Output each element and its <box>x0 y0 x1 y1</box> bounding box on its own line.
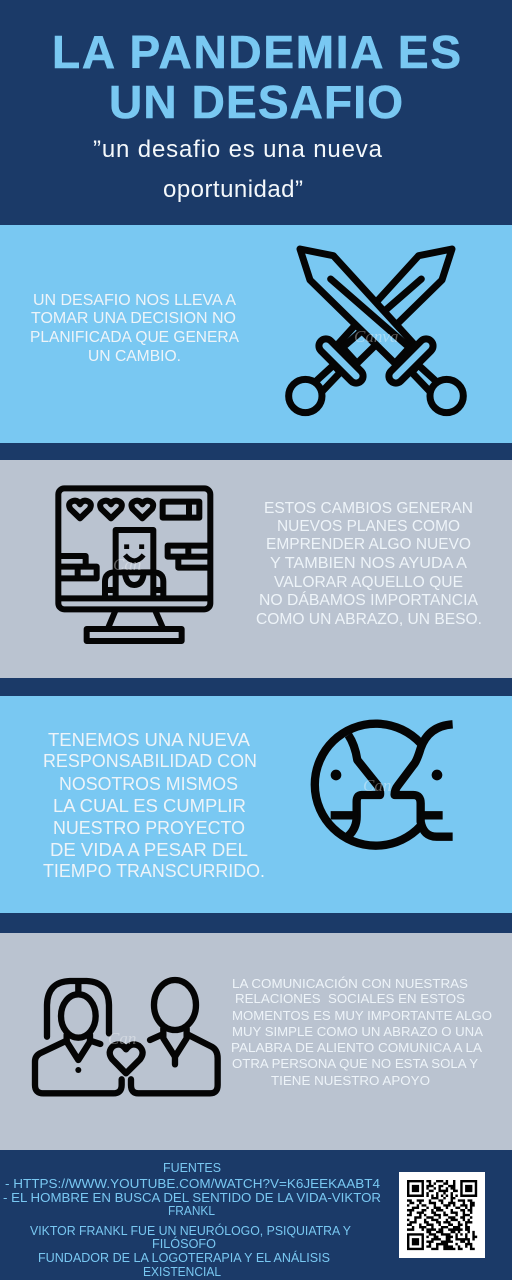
text: comunicacion: PALABRA DE ALIENTO COMUNICA A LA <box>231 1040 482 1055</box>
panel: comunicacion <box>0 933 512 1150</box>
text: comunicacion: OTRA PERSONA QUE NO ESTA SOLA Y <box>232 1056 478 1071</box>
text: responsabilidad: LA CUAL ES CUMPLIR <box>53 796 246 816</box>
text: comunicacion: TIENE NUESTRO APOYO <box>271 1073 430 1088</box>
sword left-pointing, in front <box>300 249 463 413</box>
text: responsabilidad <box>43 730 265 881</box>
text: desafio <box>30 292 240 365</box>
text: desafio: UN CAMBIO. <box>88 348 181 365</box>
text: cambios: NO DÁBAMOS IMPORTANCIA <box>259 592 479 609</box>
text: comunicacion: RELACIONES SOCIALES EN ESTOS <box>235 991 465 1006</box>
QR code <box>399 1172 485 1258</box>
text: sources: FRANKL <box>168 1204 215 1218</box>
text: comunicacion: MUY SIMPLE COMO UN ABRAZO O UNA <box>232 1024 483 1039</box>
text: comunicacion: MOMENTOS ES MUY IMPORTANTE ALGO <box>232 1008 492 1023</box>
text: sources: FUENTES <box>163 1161 221 1175</box>
text: responsabilidad: TENEMOS UNA NUEVA <box>48 730 250 750</box>
text: cambios: Y TAMBIEN NOS AYUDA A <box>270 555 468 572</box>
quote <box>93 136 383 203</box>
title: UN DESAFIO <box>109 76 403 128</box>
text: cambios: NUEVOS PLANES COMO <box>277 518 460 535</box>
text: cambios: ESTOS CAMBIOS GENERAN <box>264 500 473 517</box>
text: comunicacion: LA COMUNICACIÓN CON NUESTRAS <box>232 976 468 991</box>
text: about Viktor Frankl <box>30 1223 352 1279</box>
text: about Viktor Frankl: FILÓSOFO <box>152 1236 216 1251</box>
text: cambios: COMO UN ABRAZO, UN BESO. <box>256 611 482 628</box>
title <box>52 26 461 128</box>
text: responsabilidad: DE VIDA A PESAR DEL <box>50 840 248 860</box>
text: responsabilidad: NOSOTROS MISMOS <box>59 774 238 794</box>
watermark: Can <box>113 555 141 574</box>
title: LA PANDEMIA ES <box>52 26 461 78</box>
icon: couple with heart <box>35 980 218 1093</box>
text: about Viktor Frankl: FUNDADOR DE LA LOGOTERAPIA Y EL ANÁLISIS <box>38 1250 330 1265</box>
text: responsabilidad: RESPONSABILIDAD CON <box>43 751 257 771</box>
text: about Viktor Frankl: VIKTOR FRANKL FUE UN NEURÓLOGO, PSIQUIATRA Y <box>30 1223 352 1238</box>
text: responsabilidad: TIEMPO TRANSCURRIDO. <box>43 861 265 881</box>
text: about Viktor Frankl: EXISTENCIAL <box>143 1265 221 1279</box>
header <box>52 26 461 203</box>
text: cambios: VALORAR AQUELLO QUE <box>274 574 463 591</box>
text: cambios: EMPRENDER ALGO NUEVO <box>266 536 471 553</box>
panel: desafio <box>0 225 512 443</box>
text: comunicacion <box>231 976 492 1088</box>
watermark: Can <box>363 776 391 795</box>
panel: cambios <box>0 460 512 678</box>
watermark: Canva <box>354 327 398 346</box>
text: sources: - EL HOMBRE EN BUSCA DEL SENTIDO DE LA VIDA-VIKTOR <box>3 1191 381 1205</box>
text: responsabilidad: NUESTRO PROYECTO <box>53 818 245 838</box>
watermark: Can <box>108 1029 136 1048</box>
text: cambios <box>256 500 482 628</box>
sword right-pointing, behind <box>289 249 452 413</box>
quote: oportunidad” <box>163 176 303 203</box>
icon: monitor with character <box>58 488 210 641</box>
text: desafio: TOMAR UNA DECISION NO <box>31 310 236 327</box>
icon: crossed swords <box>289 249 463 413</box>
text: desafio: UN DESAFIO NOS LLEVA A <box>33 292 237 309</box>
panel: responsabilidad <box>0 696 512 913</box>
footer: sources <box>3 1161 485 1279</box>
text: sources: - HTTPS://WWW.YOUTUBE.COM/WATCH?V=K6JEEKAABT4 <box>5 1177 380 1191</box>
text: sources <box>3 1161 381 1218</box>
quote: ”un desafio es una nueva <box>93 136 383 163</box>
text: desafio: PLANIFICADA QUE GENERA <box>30 329 240 346</box>
icon: two faces <box>315 724 453 846</box>
